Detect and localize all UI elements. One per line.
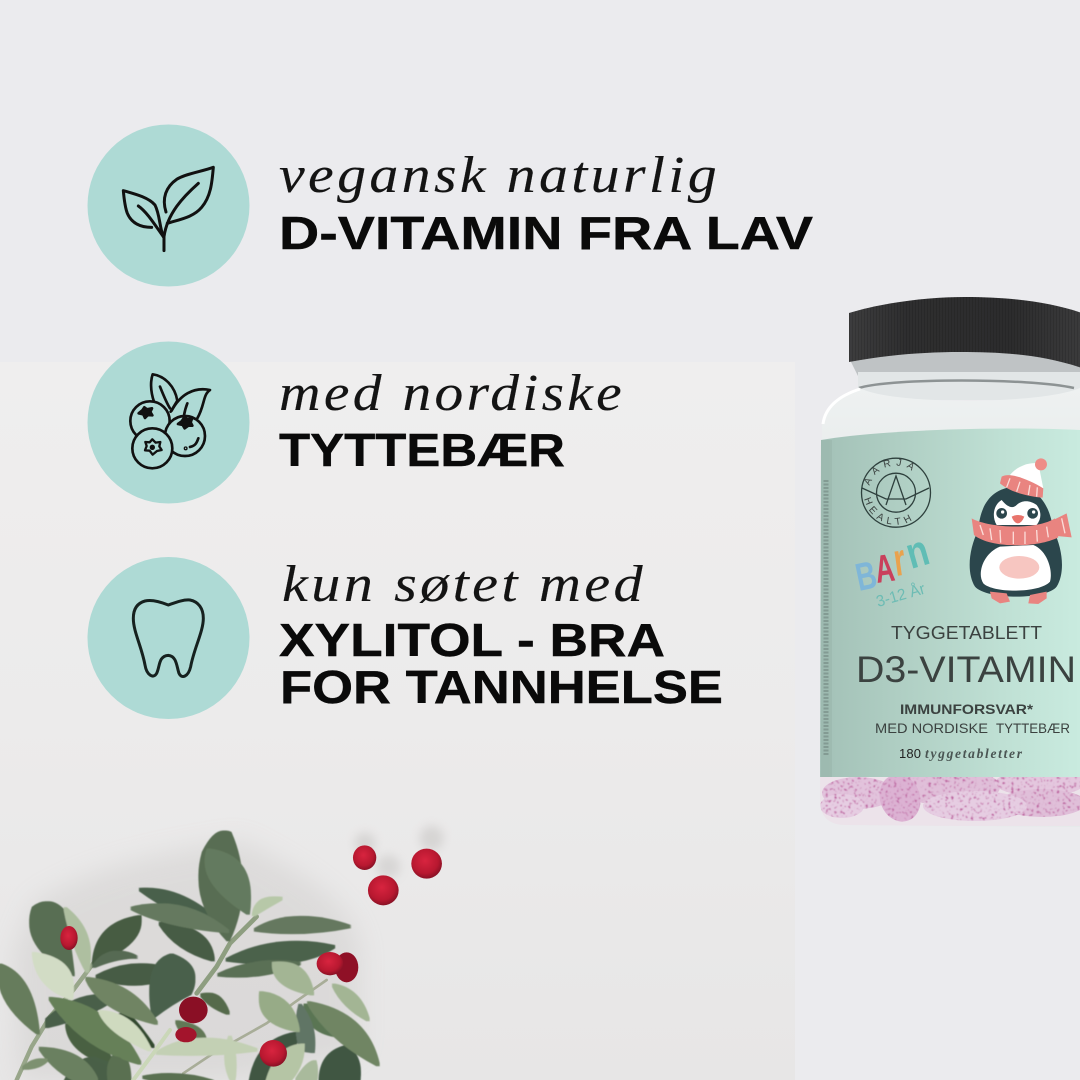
pale stem bbox=[133, 1030, 170, 1080]
icon: leaf in circle bbox=[88, 124, 250, 286]
label: MED NORDISKE TYTTEBÆR bbox=[875, 720, 1070, 736]
feature row: xylitol bbox=[88, 556, 723, 719]
heading: XYLITOL - BRA: XYLITOL - BRA bbox=[279, 614, 665, 666]
text: kun søtet med: kun søtet med bbox=[282, 556, 646, 613]
jar cap bbox=[849, 297, 1080, 368]
sprig leaves bbox=[0, 832, 378, 1080]
label: 180 tyggetabletter: tyggetabletter bbox=[925, 746, 1023, 761]
label spine bbox=[821, 440, 832, 777]
text: med nordiske: med nordiske bbox=[279, 365, 625, 422]
jar neck bbox=[850, 351, 1080, 406]
logo: Aarja Health bbox=[860, 458, 932, 528]
jar highlight bbox=[823, 389, 860, 424]
tablets bbox=[820, 777, 1080, 822]
photo: lingonberry sprig bbox=[0, 826, 444, 1080]
product: supplement jar bbox=[820, 297, 1080, 822]
feature row: vegan vitamin D bbox=[88, 124, 813, 286]
label: MED NORDISKE TYTTEBÆR: TYTTEBÆR bbox=[996, 720, 1070, 736]
heading: D-VITAMIN FRA LAV: D-VITAMIN FRA LAV bbox=[279, 207, 813, 259]
logo: Aarja Health: AARJA bbox=[864, 459, 914, 486]
heading: FOR TANNHELSE: FOR TANNHELSE bbox=[280, 661, 723, 713]
text: vegansk naturlig: vegansk naturlig bbox=[279, 147, 720, 204]
label: IMMUNFORSVAR: IMMUNFORSVAR* bbox=[900, 702, 1034, 717]
feature row: nordic lingonberries bbox=[88, 342, 625, 504]
label: TYGGETABLETT: TYGGETABLETT bbox=[891, 623, 1042, 643]
penguin mascot bbox=[970, 458, 1072, 604]
label: D3-VITAMIN: D3-VITAMIN bbox=[856, 649, 1076, 690]
label: BARN 3-12 År: n bbox=[900, 526, 934, 579]
icon: berries in circle bbox=[88, 342, 250, 504]
label: BARN 3-12 År: r bbox=[890, 534, 909, 587]
label: BARN 3-12 År bbox=[852, 526, 934, 611]
sprig shadows bbox=[13, 826, 444, 1080]
label: BARN 3-12 År: B bbox=[852, 553, 881, 600]
red berries bbox=[60, 845, 442, 1067]
label: BARN 3-12 År: A bbox=[872, 547, 897, 592]
label: 180 tyggetabletter: 180 bbox=[899, 746, 921, 761]
heading: TYTTEBÆR: TYTTEBÆR bbox=[279, 424, 565, 476]
jar glass body bbox=[820, 388, 1080, 827]
jar label bbox=[820, 428, 1080, 777]
sprig stems bbox=[17, 917, 327, 1080]
icon: tooth in circle bbox=[88, 557, 250, 719]
label: BARN 3-12 År: 3-12 År bbox=[874, 579, 928, 611]
label: MED NORDISKE TYTTEBÆR: MED NORDISKE bbox=[875, 720, 988, 736]
logo: Aarja Health: HEALTH bbox=[864, 497, 912, 525]
